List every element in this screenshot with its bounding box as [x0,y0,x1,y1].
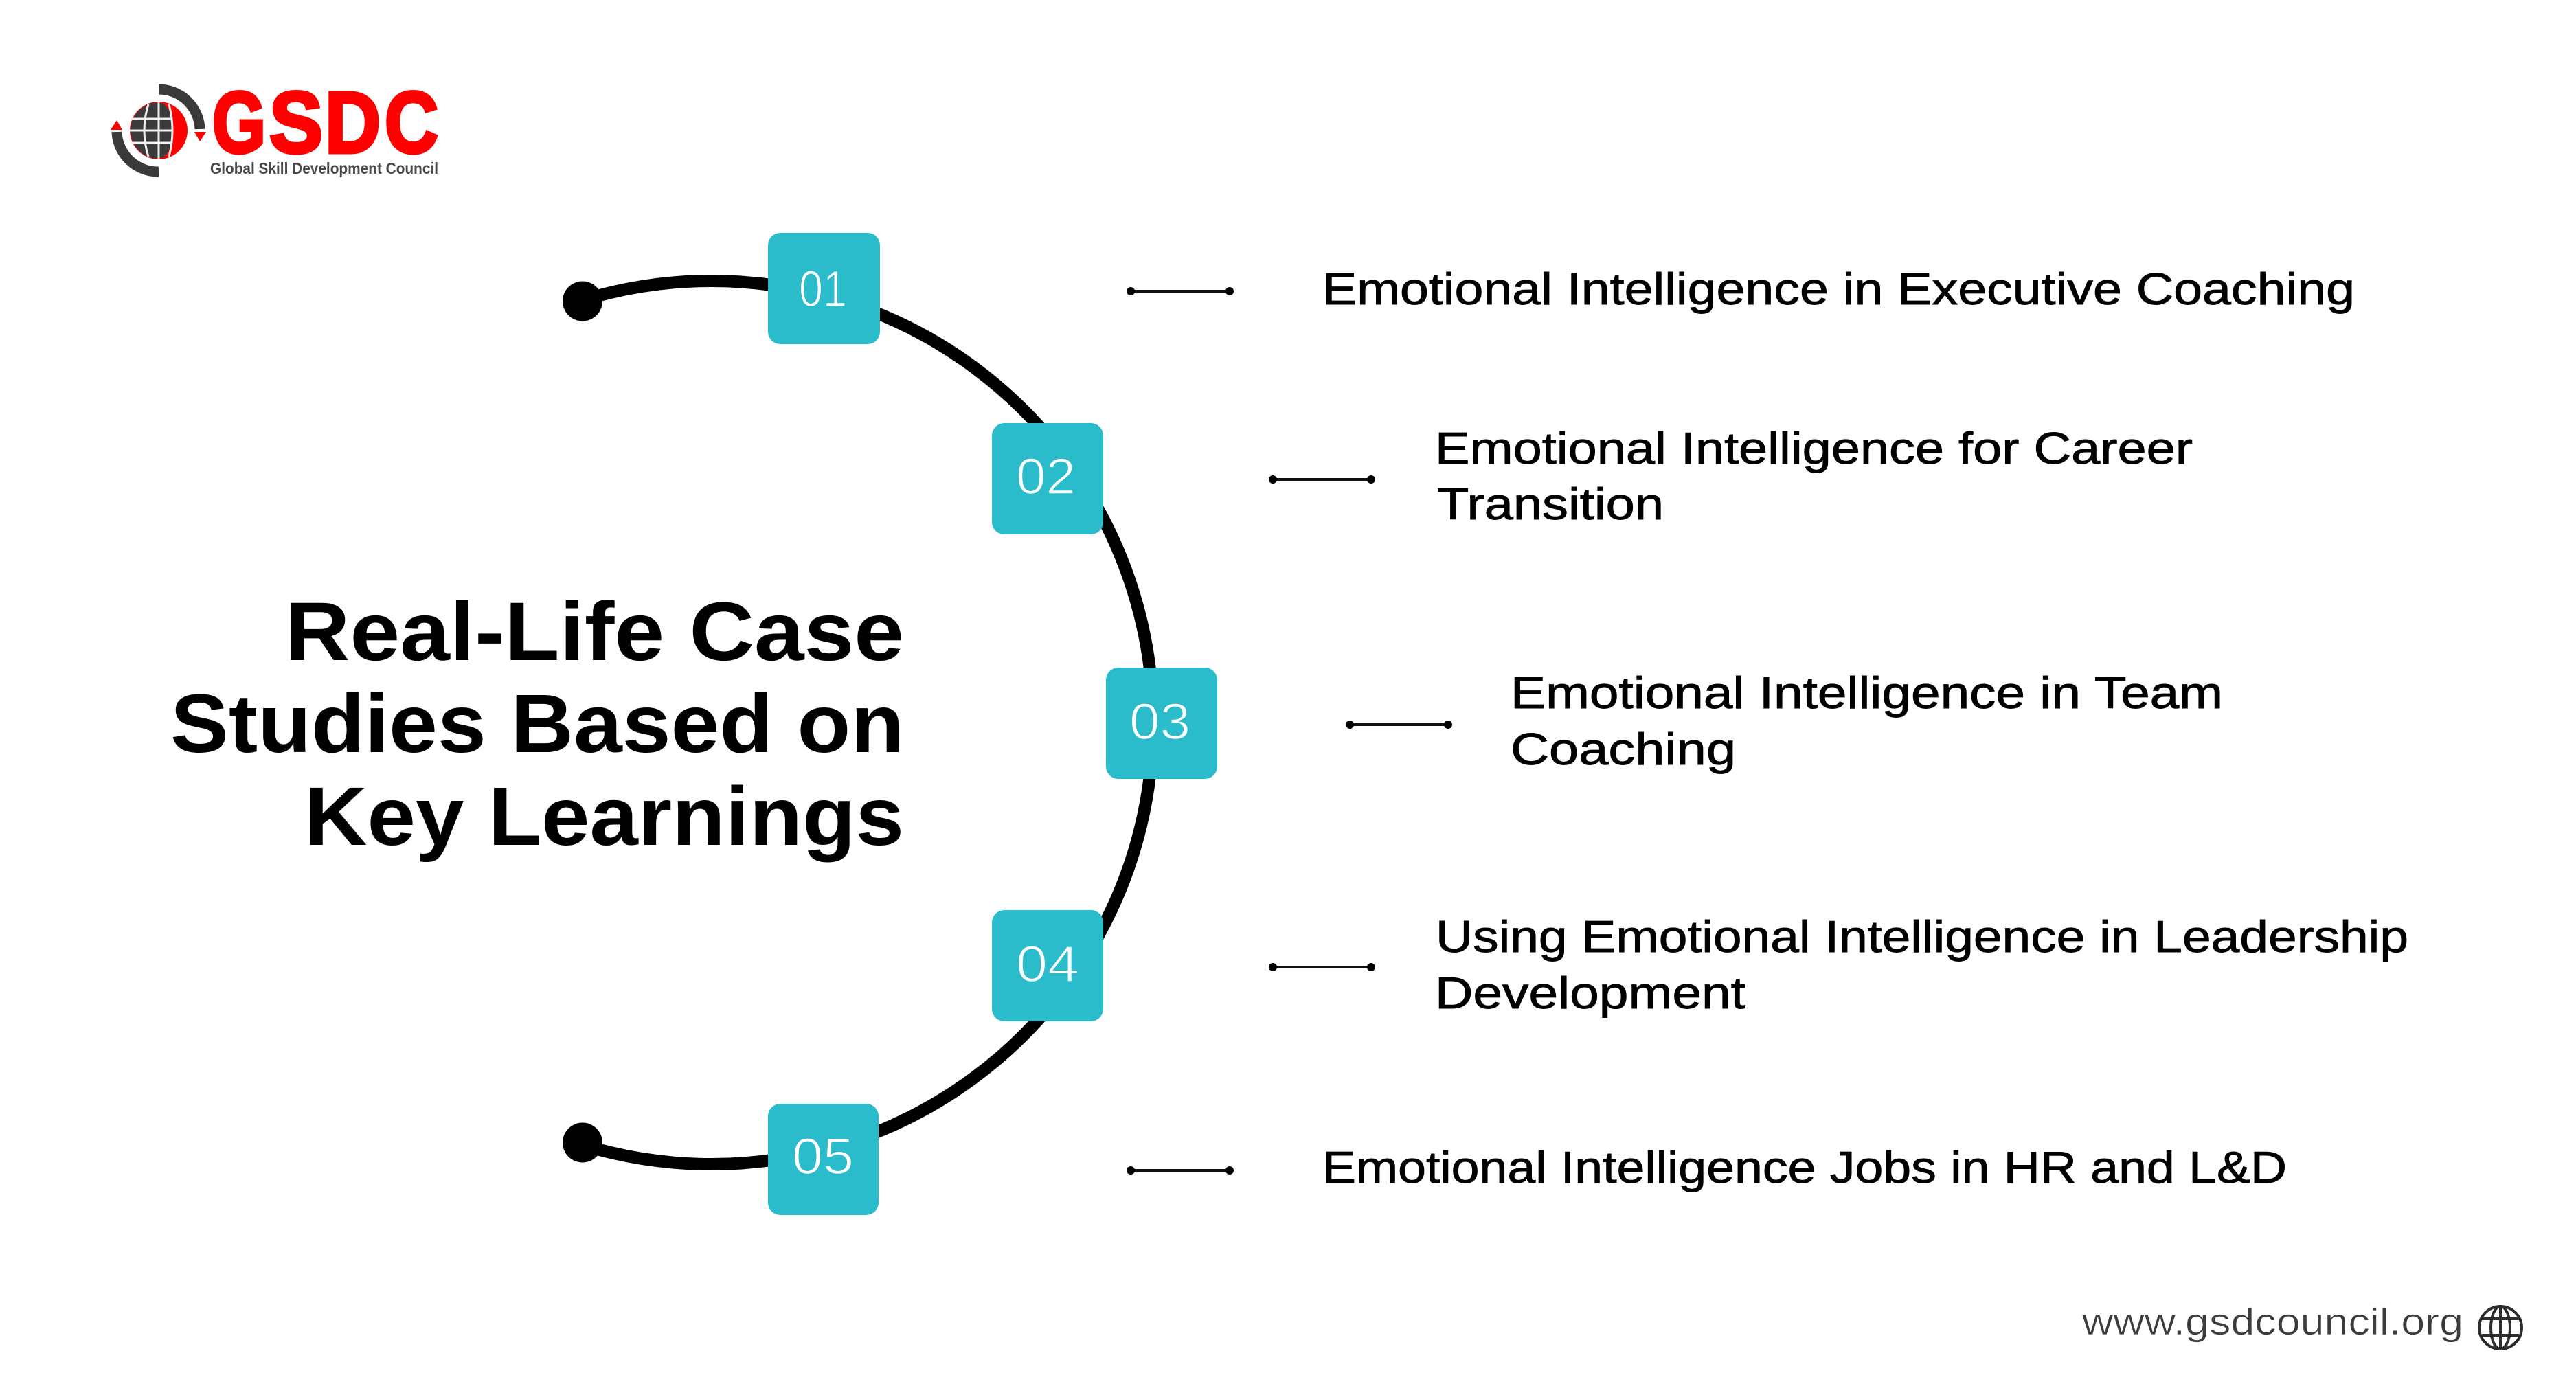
text: item 4: Development [1435,968,1745,1018]
text: item 3: Emotional Intelligence in Team [1511,668,2223,718]
text: item 4: Using Emotional Intelligence in Leadership [1436,911,2408,962]
step badge 02 [992,423,1103,534]
website url: www.gsdcouncil.org [2081,1300,2463,1343]
step badge 05: 05 [792,1128,854,1185]
text: item 5: Emotional Intelligence Jobs in HR and L&D [1322,1142,2287,1192]
text: item 3 [1511,668,2223,774]
connector 01 [1127,287,1234,295]
title [170,585,904,863]
connector 04 [1269,963,1375,971]
step badge 01: 01 [799,260,847,317]
icon: globe outline [2479,1306,2522,1349]
title: Studies Based on [170,677,904,770]
step badge 02: 02 [1016,448,1076,505]
connector 05 [1127,1166,1234,1175]
logo: GSDC [111,74,438,177]
logo wordmark [212,74,438,171]
connector 03 [1346,721,1452,729]
text: item 2: Emotional Intelligence for Career [1435,423,2193,473]
logo wordmark: D [325,74,381,171]
text: item 3: Coaching [1511,724,1736,774]
step badge 03 [1106,668,1217,779]
text: item 2: Transition [1437,479,1664,529]
step badge 03: 03 [1129,693,1190,750]
title: Real-Life Case [285,585,904,678]
logo tagline: Global Skill Development Council [210,159,438,177]
text: item 4 [1435,911,2408,1018]
step badge 04: 04 [1016,935,1079,993]
connector 02 [1269,475,1375,484]
logo wordmark: G [212,74,266,171]
step badge 05 [768,1104,879,1215]
logo wordmark: C [385,74,438,171]
timeline arc [563,281,1153,1164]
icon: globe [111,89,206,172]
title: Key Learnings [304,769,904,863]
website footer [2081,1300,2522,1349]
logo wordmark: S [269,74,323,171]
step badge 01 [768,233,880,344]
text: item 1: Emotional Intelligence in Executive Coaching [1322,264,2355,314]
text: item 2 [1435,423,2193,529]
step badge 04 [992,910,1103,1021]
